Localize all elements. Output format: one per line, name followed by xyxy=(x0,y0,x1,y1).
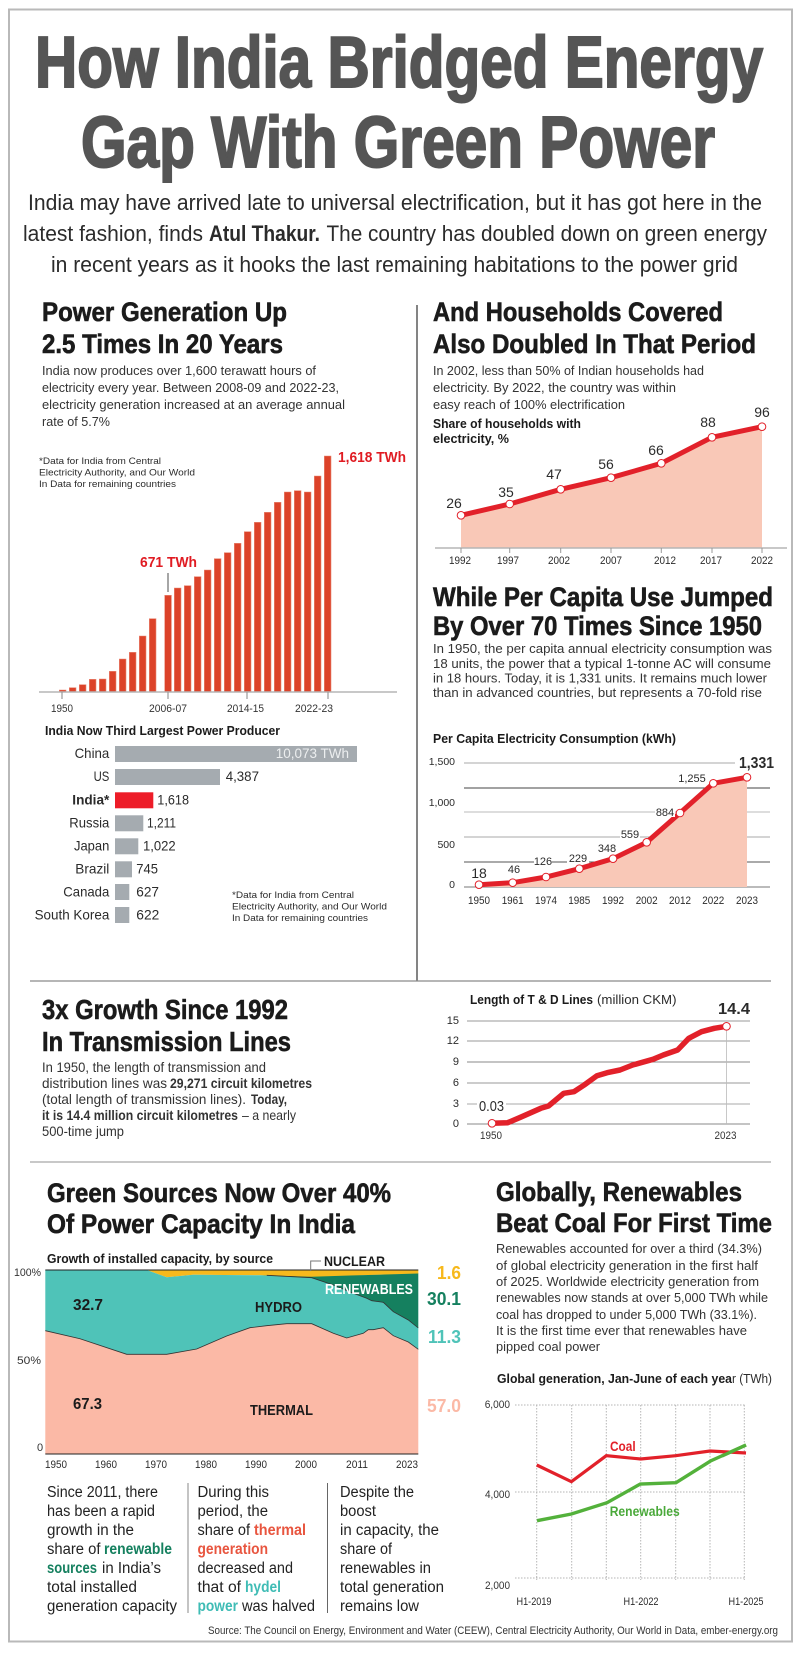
line chart: per capita consumption: 0 xyxy=(449,879,455,891)
text block: renewables beat coal: pipped coal power xyxy=(496,1339,601,1354)
stacked area chart: installed capacity: 2011 xyxy=(346,1459,368,1471)
line chart: per capita consumption: 884 xyxy=(656,807,674,819)
line chart: per capita consumption: Per Capita Electricity Consumption (kWh) xyxy=(433,731,676,746)
bar chart: India third largest producer: 627 xyxy=(136,884,159,900)
text column: renewable growth xyxy=(47,1484,177,1615)
footnote: countries data source xyxy=(232,890,387,924)
text block: transmission: 29,271 circuit kilometres xyxy=(170,1075,312,1091)
stacked area chart: installed capacity: 1950 xyxy=(45,1459,67,1471)
line chart: share of households: 2017 xyxy=(700,555,722,567)
line chart: share of households: 56 xyxy=(598,456,614,472)
text block: transmission: 500-time jump xyxy=(42,1123,124,1139)
text column: share of generation: in capacity, the xyxy=(340,1522,439,1539)
bar chart: India third largest producer: 745 xyxy=(136,860,158,876)
text column: renewable growth: total installed xyxy=(47,1579,137,1596)
stacked area chart: installed capacity: NUCLEAR xyxy=(324,1253,385,1269)
text block: power generation: electricity every year. Between 2008-09 and 2022-23, xyxy=(42,380,339,395)
line chart: global generation: 4,000 xyxy=(485,1489,510,1501)
stacked area chart: installed capacity: 67.3 xyxy=(73,1396,102,1413)
bar chart: India third largest producer: Japan xyxy=(74,837,109,853)
line chart: T&D lines length: 9 xyxy=(453,1056,459,1068)
line chart: share of households: electricity, % xyxy=(433,431,509,446)
stacked area chart: installed capacity: 1970 xyxy=(145,1459,167,1471)
text column: thermal and hydel: During this xyxy=(198,1484,269,1501)
line chart: T&D lines length: (million CKM) xyxy=(597,992,676,1007)
area: thermal xyxy=(45,1324,418,1454)
stacked area chart: installed capacity: THERMAL xyxy=(250,1403,313,1419)
text block: transmission: – a nearly xyxy=(242,1107,296,1123)
bar chart: power generation: 2014-15 xyxy=(227,703,264,715)
heading: power generation: 2.5 Times In 20 Years xyxy=(42,329,283,359)
line chart: share of households: 2012 xyxy=(654,555,676,567)
line chart: per capita consumption: 1961 xyxy=(502,895,524,907)
stacked area chart: installed capacity xyxy=(14,1251,461,1471)
bar chart: power generation: 1,618 TWh xyxy=(338,450,406,466)
line chart: share of households: 96 xyxy=(754,404,770,420)
line chart: global generation: Renewables xyxy=(610,1504,680,1519)
text block: renewables beat coal: renewables now stands at over 5,000 TWh while xyxy=(496,1290,768,1305)
bar chart: India third largest producer: Canada xyxy=(63,884,109,900)
text column: share of generation: boost xyxy=(340,1503,377,1520)
bar chart: power generation: 2022-23 xyxy=(295,703,333,715)
text block: per capita: than in advanced countries, but represents a 70-fold rise xyxy=(433,685,762,700)
bar chart: India third largest producer: US xyxy=(94,768,109,784)
text column: thermal and hydel: hydel xyxy=(245,1579,281,1596)
line chart: per capita consumption: 1,255 xyxy=(678,773,706,785)
text block: households xyxy=(433,363,704,412)
line chart: per capita consumption: 126 xyxy=(534,856,552,868)
stacked area chart: installed capacity: 57.0 xyxy=(427,1396,461,1416)
heading: power generation xyxy=(42,297,287,359)
line chart: per capita consumption: 348 xyxy=(598,843,616,855)
line chart: per capita consumption: 2022 xyxy=(702,895,724,907)
text block: households: easy reach of 100% electrification xyxy=(433,397,625,412)
text block: transmission: In 1950, the length of transmission and xyxy=(42,1059,266,1075)
text column: thermal and hydel xyxy=(198,1484,315,1615)
bar chart: India third largest producer: 4,387 xyxy=(226,768,259,784)
text column: share of generation xyxy=(340,1484,444,1615)
line chart: global generation xyxy=(485,1371,772,1608)
line chart: share of households: 88 xyxy=(700,414,716,430)
footnote: data source: Electricity Authority, and Our World xyxy=(39,468,195,478)
line chart: share of households xyxy=(433,404,787,567)
stacked area chart: installed capacity: 2023 xyxy=(396,1459,418,1471)
footnote: countries data source: *Data for India from Central xyxy=(232,890,354,901)
heading: renewables beat coal: Globally, Renewables xyxy=(496,1177,742,1207)
bar chart: India third largest producer: China xyxy=(75,745,109,761)
line chart: T&D lines length: 6 xyxy=(453,1077,459,1089)
text column: share of generation: share of xyxy=(340,1541,393,1558)
text column: share of generation: Despite the xyxy=(340,1484,414,1501)
text column: thermal and hydel: that of xyxy=(198,1579,242,1596)
bar chart: India third largest producer: Russia xyxy=(69,814,109,830)
line chart: share of households: 2002 xyxy=(548,555,570,567)
bar chart: India third largest producer: 1,022 xyxy=(143,837,176,853)
line chart: per capita consumption: 46 xyxy=(508,864,520,876)
line chart: per capita consumption: 1,331 xyxy=(739,755,774,772)
line chart: T&D lines length: 0 xyxy=(453,1118,459,1130)
panel: households covered xyxy=(433,297,787,567)
text block: households: In 2002, less than 50% of Indian households had xyxy=(433,363,704,378)
text block: renewables beat coal: of global electricity generation in the first half xyxy=(496,1258,758,1273)
stacked area chart: installed capacity: Growth of installed capacity, by source xyxy=(47,1251,273,1266)
text block: transmission: Today, xyxy=(251,1091,287,1107)
line chart: per capita consumption: 1,500 xyxy=(429,756,455,768)
subtitle: latest fashion, finds xyxy=(23,221,203,246)
stacked area chart: installed capacity: 32.7 xyxy=(73,1297,103,1314)
stacked area chart: installed capacity: 0 xyxy=(37,1442,43,1454)
heading: transmission xyxy=(42,994,291,1057)
bar chart: India third largest producer: India Now Third Largest Power Producer xyxy=(45,723,280,738)
text column: share of generation: total generation xyxy=(340,1579,444,1596)
heading: per capita xyxy=(433,582,773,641)
line chart: global generation: H1-2025 xyxy=(728,1596,764,1608)
text block: transmission: (total length of transmission lines). xyxy=(42,1091,246,1107)
panel: power generation xyxy=(35,297,406,924)
text column: thermal and hydel: was halved xyxy=(241,1598,315,1615)
text column: renewable growth: generation capacity xyxy=(47,1598,177,1615)
text block: power generation: India now produces over 1,600 terawatt hours of xyxy=(42,363,316,378)
heading: power generation: Power Generation Up xyxy=(42,297,287,327)
heading: green sources: Green Sources Now Over 40% xyxy=(47,1178,391,1208)
footnote: data source: In Data for remaining countries xyxy=(39,479,176,490)
line chart: per capita consumption: 1950 xyxy=(468,895,490,907)
bar chart: power generation: 671 TWh xyxy=(140,555,197,571)
area: hydro xyxy=(45,1270,418,1354)
heading: renewables beat coal: Beat Coal For First Time xyxy=(496,1208,772,1238)
bar chart: India third largest producer: South Korea xyxy=(35,907,109,923)
text block: per capita: 18 units, the power that a typical 1-tonne AC will consume xyxy=(433,656,771,671)
area: nuclear xyxy=(147,1270,418,1278)
line chart: global generation: r (TWh) xyxy=(732,1371,772,1386)
text column: renewable growth: in India’s xyxy=(102,1560,161,1577)
text column: renewable growth: renewable xyxy=(104,1541,172,1558)
line chart: per capita consumption xyxy=(429,731,774,907)
line chart: per capita consumption: 1974 xyxy=(535,895,557,907)
heading: households: And Households Covered xyxy=(433,297,723,327)
panel: renewables beat coal xyxy=(485,1177,772,1608)
stacked area chart: installed capacity: 1980 xyxy=(195,1459,217,1471)
bar chart: India third largest producer: 622 xyxy=(136,907,160,923)
text block: transmission: it is 14.4 million circuit kilometres xyxy=(42,1107,238,1123)
text block: renewables beat coal: of 2025. Worldwide electricity generation from xyxy=(496,1274,759,1289)
text column: renewable growth: growth in the xyxy=(47,1522,134,1539)
line chart: T&D lines length: 2023 xyxy=(714,1130,736,1142)
text block: power generation: electricity generation increased at an average annual xyxy=(42,397,345,412)
panel: green sources xyxy=(14,1178,461,1615)
line chart: share of households: 47 xyxy=(546,466,562,482)
line chart: global generation: H1-2019 xyxy=(516,1596,552,1608)
line chart: T&D lines length: Length of T & D Lines xyxy=(470,992,593,1007)
subtitle: Atul Thakur. xyxy=(209,221,320,246)
text block: renewables beat coal: Renewables accounted for over a third (34.3%) xyxy=(496,1241,762,1256)
text column: renewable growth: Since 2011, there xyxy=(47,1484,158,1501)
line chart: global generation: H1-2022 xyxy=(624,1596,658,1608)
line chart: share of households: 26 xyxy=(446,495,462,511)
line chart: share of households: 35 xyxy=(498,484,514,500)
bar chart: power generation xyxy=(39,450,406,715)
footnote: countries data source: Electricity Authority, and Our World xyxy=(232,902,387,912)
stacked area chart: installed capacity: 100% xyxy=(14,1267,41,1279)
text column: renewable growth: sources xyxy=(47,1560,97,1577)
line chart: share of households: 2007 xyxy=(600,555,622,567)
bar chart: India third largest producer: 1,618 xyxy=(157,791,189,807)
text block: transmission: distribution lines was xyxy=(42,1075,167,1091)
stacked area chart: installed capacity: 1960 xyxy=(95,1459,117,1471)
text column: thermal and hydel: generation xyxy=(198,1541,268,1558)
bar chart: India third largest producer: 1,211 xyxy=(147,814,176,830)
line chart: per capita consumption: 1992 xyxy=(602,895,624,907)
bar chart: power generation: 2006-07 xyxy=(149,703,187,715)
text column: thermal and hydel: period, the xyxy=(198,1503,268,1520)
title xyxy=(35,23,763,183)
subtitle xyxy=(23,190,767,277)
line chart: T&D lines length: 0.03 xyxy=(479,1098,504,1115)
text column: share of generation: renewables in xyxy=(340,1560,431,1577)
text block: power generation xyxy=(42,363,345,429)
line chart: T&D lines length: 14.4 xyxy=(718,1001,750,1018)
line chart: per capita consumption: 1985 xyxy=(568,895,590,907)
line chart: global generation: Global generation, Jan-June of each yea xyxy=(497,1371,733,1386)
line chart: share of households: 1997 xyxy=(497,555,519,567)
line chart: per capita consumption: 559 xyxy=(621,829,639,841)
heading: renewables beat coal xyxy=(496,1177,772,1238)
bar chart: India third largest producer: 10,073 TWh xyxy=(276,745,349,761)
stacked area chart: installed capacity: 30.1 xyxy=(427,1289,461,1309)
text column: thermal and hydel: power xyxy=(198,1598,238,1615)
heading: green sources xyxy=(47,1178,391,1239)
text column: share of generation: remains low xyxy=(340,1598,420,1615)
text column: thermal and hydel: thermal xyxy=(254,1522,306,1539)
bar chart: India third largest producer xyxy=(35,723,357,923)
heading: transmission: 3x Growth Since 1992 xyxy=(42,994,288,1025)
line chart: per capita consumption: 1,000 xyxy=(429,797,455,809)
text block: renewables beat coal xyxy=(496,1241,768,1354)
text column: thermal and hydel: share of xyxy=(198,1522,251,1539)
bar chart: India third largest producer: Brazil xyxy=(75,860,109,876)
text block: per capita xyxy=(433,641,772,700)
heading: green sources: Of Power Capacity In India xyxy=(47,1209,355,1239)
line chart: per capita consumption: 2002 xyxy=(636,895,658,907)
text block: power generation: rate of 5.7% xyxy=(42,414,110,429)
heading: households xyxy=(433,297,756,359)
line chart: global generation: Coal xyxy=(610,1439,636,1454)
line chart: per capita consumption: 2023 xyxy=(736,895,758,907)
stacked area chart: installed capacity: 50% xyxy=(17,1355,41,1367)
heading: households: Also Doubled In That Period xyxy=(433,329,756,359)
text block: transmission xyxy=(42,1059,312,1139)
line chart: T&D lines length: 15 xyxy=(447,1015,459,1027)
stacked area chart: installed capacity: 1.6 xyxy=(437,1263,461,1283)
panel: transmission lines xyxy=(42,992,750,1142)
text block: renewables beat coal: coal has dropped to under 5,000 TWh (33.1%). xyxy=(496,1307,757,1322)
line chart: per capita consumption: 500 xyxy=(437,839,455,851)
heading: transmission: In Transmission Lines xyxy=(42,1026,291,1057)
subtitle: The country has doubled down on green energy xyxy=(326,221,767,246)
stacked area chart: installed capacity: 1990 xyxy=(245,1459,267,1471)
text column: thermal and hydel: decreased and xyxy=(198,1560,293,1577)
line chart: per capita consumption: 2012 xyxy=(669,895,691,907)
line chart: share of households: 2022 xyxy=(751,555,773,567)
heading: per capita: By Over 70 Times Since 1950 xyxy=(433,611,762,641)
line chart: T&D lines length: 3 xyxy=(453,1098,459,1110)
panel: per capita use xyxy=(429,582,774,907)
line chart: share of households: 66 xyxy=(648,442,664,458)
text block: renewables beat coal: It is the first time ever that renewables have xyxy=(496,1323,747,1338)
line chart: T&D lines length xyxy=(447,992,750,1142)
text block: per capita: In 1950, the per capita annual electricity consumption was xyxy=(433,641,772,656)
text block: per capita: in 18 hours. Today, it is 1,331 units. It remains much lower xyxy=(433,670,768,686)
stacked area chart: installed capacity: RENEWABLES xyxy=(325,1282,413,1298)
heading: per capita: While Per Capita Use Jumped xyxy=(433,582,773,612)
footnote: data source xyxy=(39,456,195,490)
text block: households: electricity. By 2022, the country was within xyxy=(433,380,676,395)
line chart: share of households: 1992 xyxy=(449,555,471,567)
line chart: T&D lines length: 1950 xyxy=(480,1130,502,1142)
area: renewables xyxy=(260,1274,418,1328)
stacked area chart: installed capacity: 2000 xyxy=(295,1459,317,1471)
text column: renewable growth: share of xyxy=(47,1541,101,1558)
line chart: T&D lines length: 12 xyxy=(447,1035,459,1047)
text column: renewable growth: has been a rapid xyxy=(47,1503,155,1520)
bar chart: India third largest producer: India* xyxy=(72,791,110,807)
footnote: data source: *Data for India from Central xyxy=(39,456,161,467)
subtitle: in recent years as it hooks the last remaining habitations to the power grid xyxy=(51,252,738,277)
line chart: per capita consumption: 229 xyxy=(569,853,587,865)
footnote: countries data source: In Data for remaining countries xyxy=(232,913,368,924)
line chart: global generation: 2,000 xyxy=(485,1580,510,1592)
line chart: share of households: Share of households with xyxy=(433,416,581,431)
bar chart: power generation: 1950 xyxy=(51,703,73,715)
line chart: global generation: 6,000 xyxy=(485,1399,510,1411)
line chart: per capita consumption: 18 xyxy=(471,865,487,881)
stacked area chart: installed capacity: HYDRO xyxy=(255,1300,302,1316)
stacked area chart: installed capacity: 11.3 xyxy=(428,1327,461,1347)
subtitle: India may have arrived late to universal electrification, but it has got here in the xyxy=(28,190,762,215)
